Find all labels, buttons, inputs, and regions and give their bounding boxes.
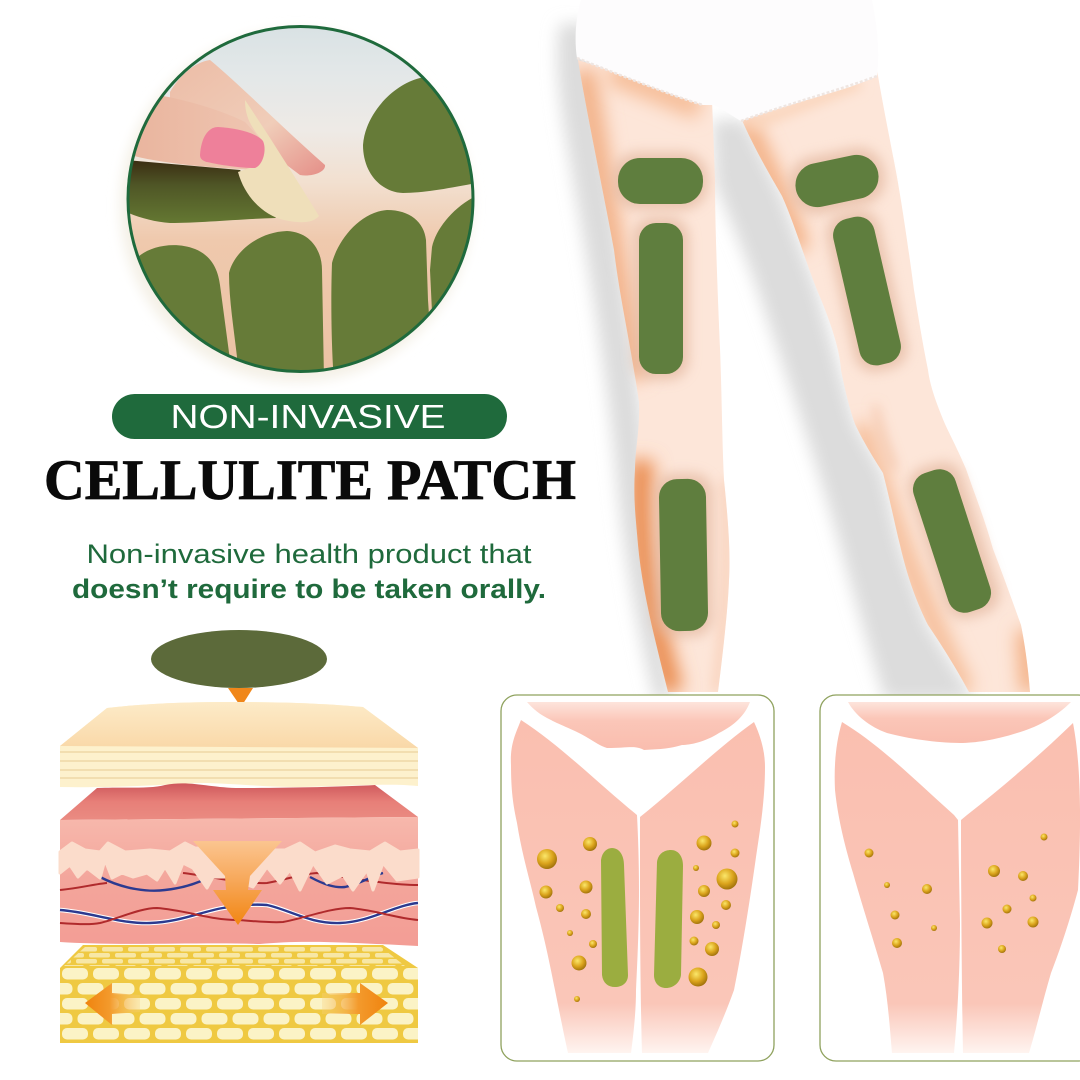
description text	[72, 539, 546, 604]
left leg	[578, 60, 730, 692]
upper right patch	[363, 77, 482, 193]
epidermis layer	[60, 702, 418, 787]
before card	[501, 695, 774, 1061]
fat balls	[864, 834, 1048, 953]
patch: left mid thigh	[633, 217, 689, 380]
front finger	[135, 96, 256, 170]
back finger	[170, 60, 325, 175]
badge: Non-Invasive: NON-INVASIVE	[170, 398, 446, 435]
description text: Non-invasive health product that	[86, 539, 532, 569]
dark patch under fingers	[126, 160, 276, 223]
bottom patch b	[229, 231, 324, 380]
right leg	[742, 72, 1030, 692]
dermis layer	[60, 783, 418, 946]
small arrow down	[228, 688, 253, 707]
blood vessels upper	[60, 873, 418, 890]
legs photo	[558, 0, 1040, 700]
abdomen	[848, 702, 1071, 743]
fat balls	[537, 820, 740, 1002]
badge: Non-Invasive	[112, 394, 507, 439]
left thigh after	[835, 722, 960, 1053]
title: CELLULITE PATCH	[44, 449, 576, 512]
circular photo: patch being peeled	[120, 26, 482, 382]
bottom patch a	[139, 245, 230, 354]
papillae band	[60, 843, 418, 890]
patch: right upper thigh	[784, 143, 890, 219]
patch: left upper thigh	[612, 152, 708, 210]
fingernail	[200, 127, 265, 168]
patch: left calf	[654, 473, 713, 637]
patch ellipse	[151, 630, 327, 688]
bottom patch d	[430, 198, 472, 309]
patches	[601, 848, 628, 987]
white shorts	[576, 0, 878, 121]
description text: doesn’t require to be taken orally.	[72, 574, 546, 604]
left thigh before	[511, 720, 639, 1053]
patch: right calf	[903, 457, 1005, 624]
peeled patch	[238, 100, 319, 222]
right thigh before	[640, 722, 765, 1053]
central down arrow	[193, 841, 282, 925]
after card	[820, 695, 1080, 1061]
abdomen	[527, 702, 750, 750]
bottom patch c	[331, 210, 430, 380]
right thigh after	[961, 723, 1080, 1053]
leg shadows	[558, 24, 975, 700]
blood vessels lower	[60, 903, 418, 923]
left arrow	[85, 983, 140, 1025]
fat layer	[60, 945, 418, 1043]
skin layers diagram	[60, 630, 418, 1043]
patch: right mid thigh	[822, 206, 912, 376]
right arrow	[322, 983, 388, 1025]
